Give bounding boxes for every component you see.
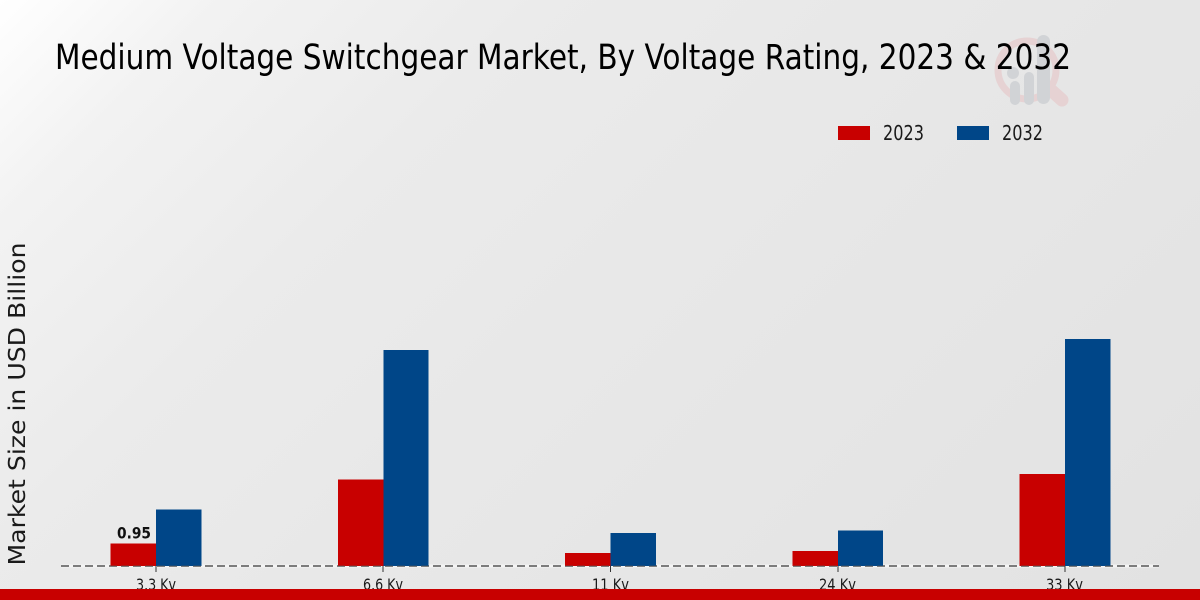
bars: 33 Kv — [1020, 339, 1110, 566]
x-axis labels: 3.3 Kv — [136, 575, 176, 594]
x-axis labels: 33 Kv — [1046, 575, 1083, 594]
x-axis labels: 24 Kv — [819, 575, 856, 594]
legend item: 2032: 2032 — [1002, 121, 1043, 145]
legend item: 2023: 2023 — [883, 121, 924, 145]
baseline dashes over bars — [61, 565, 1159, 567]
y-axis title: Market Size in USD Billion — [5, 242, 31, 566]
icon: watermark magnifier logo — [998, 35, 1062, 105]
bar chart — [61, 339, 1159, 566]
bars: 24 Kv — [792, 530, 883, 566]
x-axis labels: 11 Kv — [592, 575, 629, 594]
x-axis labels — [136, 566, 1083, 594]
baseline — [61, 564, 1159, 568]
footer bar — [0, 589, 1200, 600]
legend item: 2032 — [957, 121, 1043, 145]
x-axis labels: 6.6 Kv — [363, 575, 403, 594]
legend — [838, 121, 1043, 145]
legend item: 2023 — [838, 121, 924, 145]
bars: 11 Kv — [565, 533, 656, 566]
bars: 6.6 Kv — [338, 350, 428, 566]
bars: 3.3 Kv — [110, 510, 202, 566]
value label: 0.95: 0.95 — [117, 524, 151, 542]
